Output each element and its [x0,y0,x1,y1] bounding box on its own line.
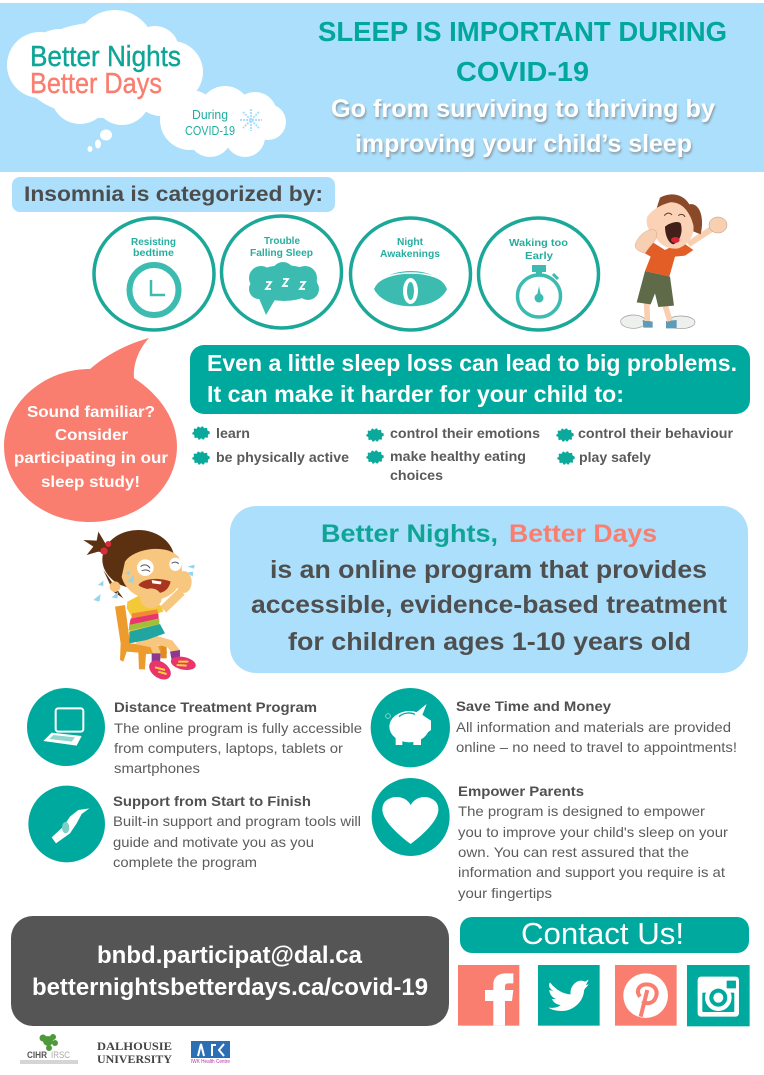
icon: resisting bedtime: Resisting [131,236,176,248]
feature: save time and money: online – no need to travel to appointments! [456,739,737,755]
feature: support: Support from Start to Finish [113,793,311,809]
feature: empower parents [372,778,728,901]
panel: program description [230,506,748,673]
header banner [0,3,764,172]
icon: twitter [538,965,600,1026]
icon: trouble falling sleep [222,216,342,328]
heading: contact us: Contact Us! [521,916,684,951]
icon: waking too early: Waking too [509,237,568,249]
icon: resisting bedtime [94,218,214,330]
icon: waking too early [478,218,598,330]
icon: instagram [687,965,750,1026]
heading: contact us [460,916,749,953]
title: SLEEP IS IMPORTANT DURING [318,16,727,47]
feature: empower parents: own. You can rest assured that the [458,844,689,860]
panel: program description: Better Nights, [321,520,498,548]
feature: save time and money: Save Time and Money [456,698,611,714]
feature: support: guide and motivate you as you [113,834,314,850]
logo: thought clouds [7,10,286,157]
logo: thought clouds: Better Nights [30,41,181,73]
panel: contact details: betternightsbetterdays.ca/covid-19 [32,974,428,1001]
list: problems [194,425,734,483]
feature: support: Built-in support and program tools will [113,813,361,829]
panel: contact details [11,916,449,1026]
title [318,16,727,87]
feature: distance treatment: from computers, laptops, tablets or [114,740,343,756]
icon: trouble falling sleep: Falling Sleep [250,247,313,259]
speech bubble: call to action: participating in our [14,450,168,467]
panel: program description: Better Days [509,520,657,548]
feature: distance treatment: The online program is fully accessible [114,720,362,736]
list: problems: be physically active [216,449,349,465]
feature: distance treatment: smartphones [114,760,200,776]
feature: save time and money [371,688,737,767]
banner: sleep loss: Even a little sleep loss can lead to big problems. [207,350,737,376]
logo: CIHR [20,1034,78,1064]
illustration: crying girl [83,530,197,683]
feature: save time and money: All information and materials are provided [456,719,731,735]
panel: program description: accessible, evidence-based treatment [251,591,728,619]
icon: facebook [458,965,519,1026]
heading: insomnia: Insomnia is categorized by: [24,183,323,206]
list: problems: control their emotions [390,425,540,441]
feature: empower parents: Empower Parents [458,783,584,799]
icon: night awakenings [350,218,470,330]
icon: laptop [27,688,105,766]
icon: piggy bank [371,688,450,767]
list: problems: make healthy eating [390,448,526,464]
logo: Dalhousie University [97,1041,173,1066]
illustration: yawning boy [621,194,727,329]
subtitle [331,95,715,158]
speech bubble: call to action [4,338,177,522]
logo: CIHR: CIHR [27,1050,47,1060]
logo: IWK Health Centre [191,1041,230,1065]
feature: support: complete the program [113,854,257,870]
list: problems: learn [216,425,250,441]
feature: support [28,786,361,870]
list: problems: control their behaviour [578,425,734,441]
banner: sleep loss: It can make it harder for your child to: [207,381,624,407]
icon: night awakenings: Awakenings [380,248,440,260]
list: problems: play safely [579,449,651,465]
icon: trouble falling sleep: Trouble [264,235,300,247]
title: COVID-19 [456,56,589,87]
feature: distance treatment: Distance Treatment Program [114,699,317,715]
icon: waking too early: Early [525,250,553,262]
logo: IWK Health Centre: IWK Health Centre [191,1059,230,1065]
logo: CIHR: IRSC [51,1050,70,1060]
feature: empower parents: you to improve your child's sleep on your [458,824,728,840]
speech bubble: call to action: Consider [55,427,128,444]
speech bubble: call to action: sleep study! [41,474,140,491]
panel: contact details: bnbd.participat@dal.ca [97,942,363,969]
subtitle: improving your child’s sleep [355,130,692,158]
feature: empower parents: your fingertips [458,885,552,901]
icon: heart [372,778,450,856]
logo: thought clouds: Better Days [30,68,162,100]
logo: Dalhousie University: DALHOUSIE [97,1041,172,1053]
icon: pinterest [615,965,677,1026]
icon: night awakenings: Night [397,236,423,248]
logo: Dalhousie University: UNIVERSITY [97,1054,173,1066]
subtitle: Go from surviving to thriving by [331,95,715,123]
list: problems: choices [390,467,443,483]
heading: insomnia [12,177,335,212]
logo: thought clouds: During [192,107,228,122]
banner: sleep loss [190,345,750,414]
logo: thought clouds: COVID-19 [185,123,235,138]
icon: helping hands [28,786,105,862]
panel: program description: is an online program that provides [270,556,707,584]
feature: empower parents: The program is designed to empower [458,803,705,819]
feature: distance treatment [27,688,362,776]
feature: empower parents: information and support you require is at [458,864,725,880]
icon: resisting bedtime: bedtime [133,247,174,259]
speech bubble: call to action: Sound familiar? [27,404,155,421]
panel: program description: for children ages 1-10 years old [288,628,691,656]
